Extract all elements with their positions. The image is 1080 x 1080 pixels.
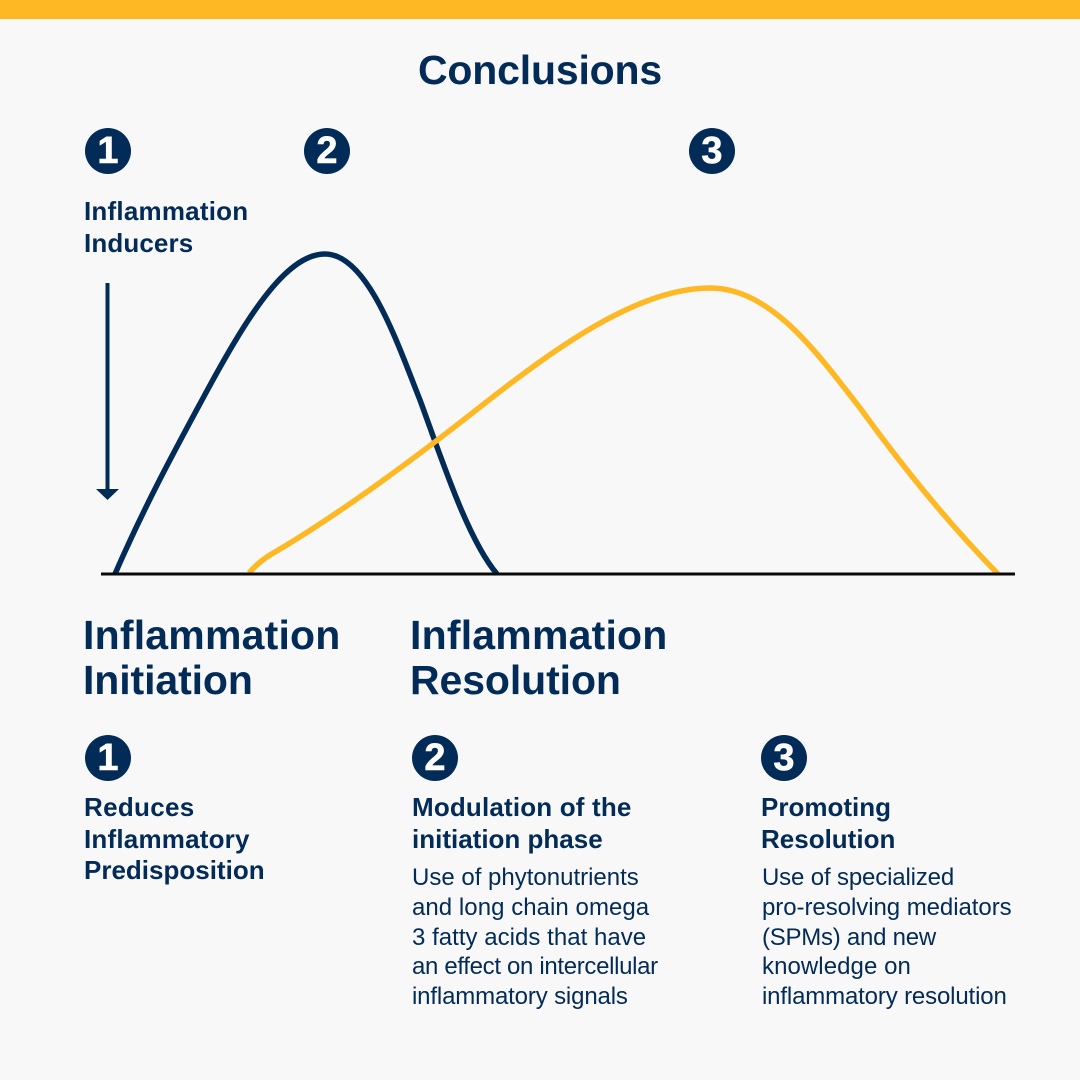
column 2 body text: 3 fatty acids that have [412,924,646,951]
heading: inflammation resolution: Inflammation [410,612,668,658]
column 2 number badge: 2 [424,737,446,779]
resolution curve [249,288,998,574]
heading: inflammation initiation [83,612,341,703]
column 3 number badge [761,735,807,781]
column 3 heading [761,792,895,854]
column 3 number badge: 3 [773,737,795,779]
column 2 body text: an effect on intercellular [412,953,658,980]
initiation curve [115,254,497,574]
arrow: inducers pointing down [96,283,119,500]
column 1 heading: Predisposition [84,855,265,885]
label: inflammation inducers: Inducers [84,228,193,258]
heading: inflammation resolution [410,612,668,703]
column 3 body text [762,864,1012,1010]
baseline axis [101,572,1015,576]
heading: inflammation initiation: Inflammation [83,612,341,658]
column 3 body text: Use of specialized [762,864,954,891]
column 1 number badge [85,735,131,781]
number badge 2 [304,128,350,174]
column 2 body text: Use of phytonutrients [412,864,639,891]
column 3 body text: inflammatory resolution [762,983,1007,1010]
column 1 number badge: 1 [97,737,119,779]
column 3 body text: pro-resolving mediators [762,894,1012,921]
label: inflammation inducers: Inflammation [84,196,248,226]
number badge 2: 2 [316,130,338,172]
top bar [0,0,1080,19]
column 2 body text: and long chain omega [412,894,649,921]
number badge 3: 3 [701,130,723,172]
column 3 heading: Promoting [761,792,891,822]
column 1 heading [84,792,265,885]
column 2 heading [412,792,632,854]
heading: inflammation resolution: Resolution [410,657,621,703]
column 2 body text: inflammatory signals [412,983,628,1010]
column 1 heading: Inflammatory [84,824,250,854]
column 2 heading: Modulation of the [412,792,632,822]
number badge 3 [689,128,735,174]
column 3 body text: knowledge on [762,953,911,980]
column 2 number badge [412,735,458,781]
column 2 heading: initiation phase [412,824,603,854]
title: Conclusions [418,47,662,93]
column 3 heading: Resolution [761,824,895,854]
number badge 1 [85,128,131,174]
number badge 1: 1 [97,130,119,172]
heading: inflammation initiation: Initiation [83,657,253,703]
label: inflammation inducers [84,196,248,258]
column 3 body text: (SPMs) and new [762,924,936,951]
column 1 heading: Reduces [84,792,194,822]
column 2 body text [412,864,658,1010]
